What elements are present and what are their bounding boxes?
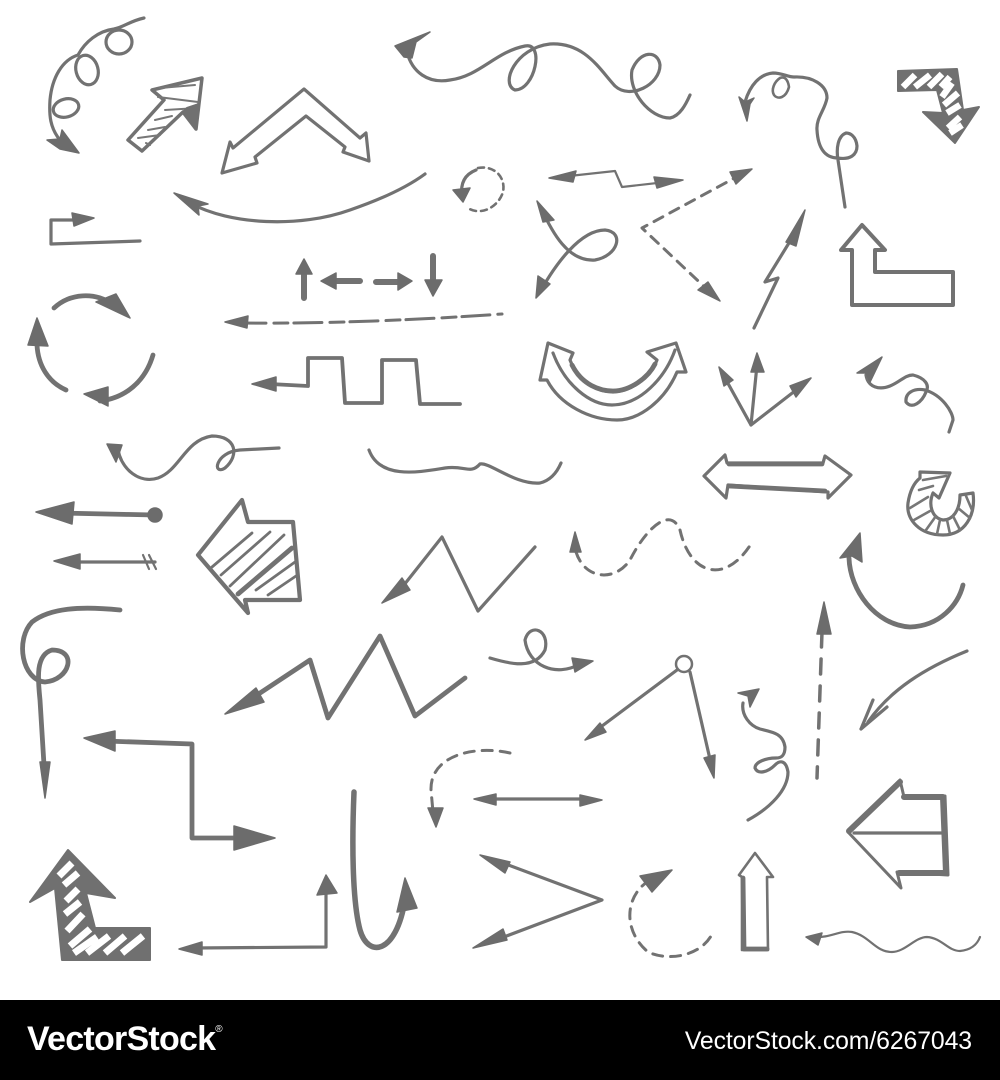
arrow: triple fork [719, 353, 811, 425]
arrow: wavy looped left [107, 436, 279, 479]
arrow: jagged zigzag down-left [225, 636, 465, 718]
arrow: hatched circular [908, 472, 973, 535]
arrow: double chevron outline [222, 89, 369, 173]
arrow: long curved left [174, 174, 425, 222]
arrow: dashed circle [630, 870, 711, 957]
arrow: large arc up [840, 533, 963, 627]
arrow: dashed V double head [642, 169, 752, 301]
wavy brace line [369, 450, 561, 483]
arrow: long left with ball end [36, 502, 162, 524]
brand logo: VectorStock® [27, 1020, 223, 1058]
arrow: long dashed left [225, 314, 502, 328]
arrow: broken circle of three [28, 294, 153, 406]
arrow: hook with loop down [23, 608, 120, 798]
arrow: small curl right [857, 357, 953, 432]
image url: VectorStock.com/6267043 [685, 1028, 972, 1055]
arrow: bent outline up [841, 225, 953, 305]
arrow: L double head [179, 875, 337, 955]
arrow: tall fish hook [353, 792, 417, 947]
arrow: four direction set [296, 256, 442, 298]
arrow: fletched thin left [54, 554, 156, 569]
arrow: hatched bent down-right [898, 69, 979, 143]
arrow: thin zigzag double head [549, 171, 683, 188]
arrow: curl with loop top right [739, 73, 857, 207]
arrow: outlined split left block [848, 780, 948, 888]
arrow: curved double head outline [540, 343, 686, 420]
arrow: square wave left [252, 358, 460, 404]
arrow: thin double head horizontal [474, 794, 602, 806]
arrow: large hatched left block [198, 500, 300, 613]
arrow: wavy line with loops top centre [395, 32, 690, 118]
arrow: small looped right [490, 630, 593, 672]
arrow: V shape double head [473, 855, 602, 948]
arrow: small dashed circle [453, 168, 503, 211]
arrow: dashed wave [570, 520, 751, 575]
arrow: dashed curve down [428, 750, 510, 827]
arrow: hatched block up-right [128, 78, 202, 151]
arrow: lightning bolt [754, 210, 805, 328]
arrow: squiggle down-left [738, 689, 788, 820]
arrow: dashed thin up [817, 602, 831, 778]
arrow: narrow outlined up [739, 853, 773, 950]
arrow: stepped double head [84, 731, 275, 850]
arrow: crossing loop double head [536, 201, 617, 298]
arrow: curved down-left thin [861, 651, 967, 729]
arrow: hatched bent up large [30, 850, 150, 960]
arrow: wavy thin left [806, 932, 980, 952]
arrow: double head outline horizontal [704, 455, 851, 498]
arrow: ring with two arrows [585, 656, 715, 778]
arrow: bent small flat [51, 213, 140, 244]
arrow: looping arc top left [47, 18, 144, 153]
arrow: zigzag down-left [382, 537, 535, 611]
footer bar [0, 1000, 1000, 1080]
